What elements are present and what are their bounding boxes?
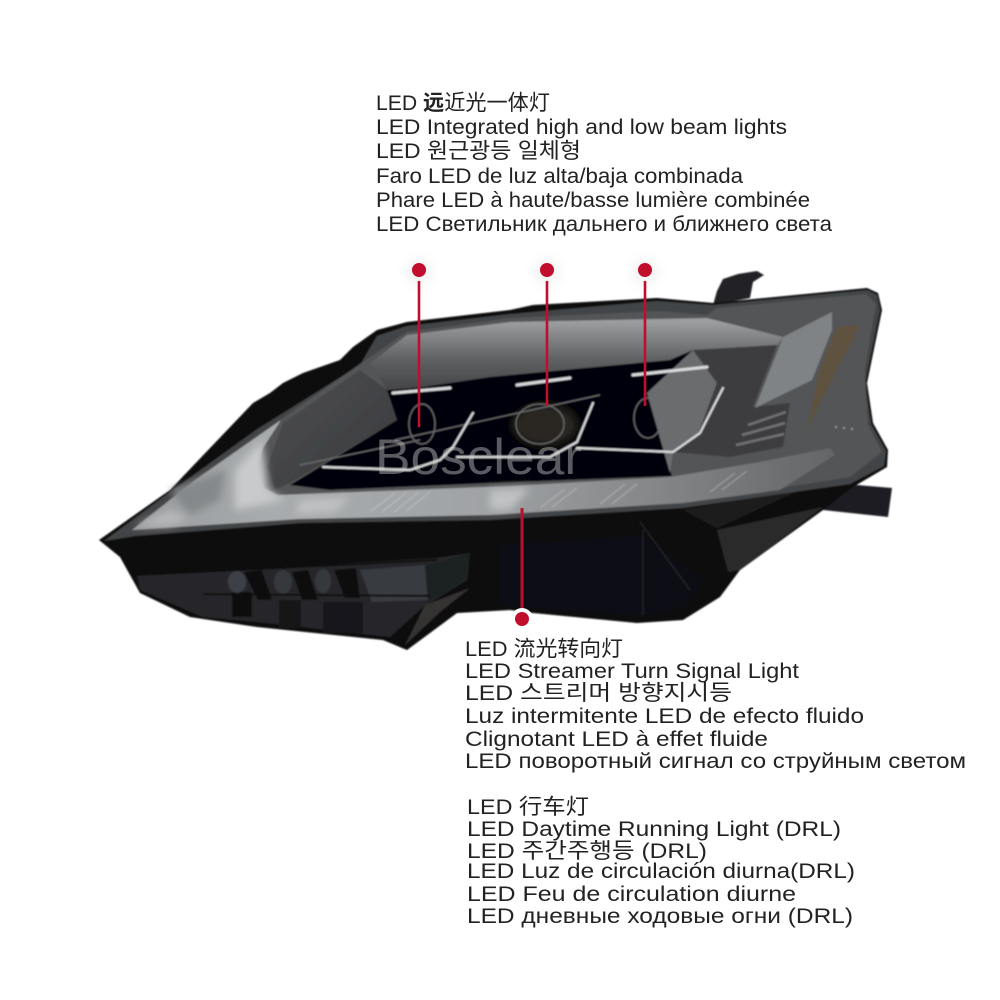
lens clear area [132,294,882,530]
marker pin: left projector [407,260,431,427]
reflector slats [736,412,786,445]
inner dark recess [673,345,790,457]
outer lens frame [104,290,886,541]
left inner grey panel [267,370,397,490]
text block: turn signal: LED 스트리머 방향지시등 [465,681,732,705]
text block: daytime running light: LED дневные ходовые огни (DRL) [467,904,853,928]
text block: daytime running light: LED Daytime Running Light (DRL) [467,817,841,841]
right lens light strip [755,312,832,408]
text block: turn signal: LED Streamer Turn Signal Light [465,659,799,683]
text block: high and low beam: LED Integrated high and low beam lights [376,115,787,139]
text block: turn signal: Luz intermitente LED de efecto fluido [465,704,864,728]
text block: high and low beam: Phare LED à haute/basse lumière combinée [376,188,810,212]
text block: high and low beam: Faro LED de luz alta/baja combinada [376,164,743,188]
watermark: Bosclear [375,429,582,485]
amber reflector [807,325,860,430]
text block: high and low beam: LED Светильник дальнего и ближнего света [376,212,832,236]
lower housing reflections [500,490,823,616]
black projector cavity [290,350,693,490]
text block: turn signal: LED 流光转向灯 [465,637,623,661]
DRL light band [132,420,835,530]
text block: turn signal [465,637,966,773]
text block: high and low beam: LED 원근광등 일체형 [376,139,581,163]
marker pin: right projector [633,260,657,406]
low beam projector lenses [300,395,662,465]
DRL band shading [135,440,530,526]
text block: high and low beam: LED 远近光一体灯 [376,91,550,115]
rear mounting bracket right [823,485,892,517]
upper lens band [370,318,783,390]
text block: daytime running light: LED Luz de circulación diurna(DRL) [467,859,855,883]
plastic mounting bracket [137,553,470,645]
text block: turn signal: Clignotant LED à effet fluide [465,727,768,751]
text block: daytime running light: LED 주간주행등 (DRL) [467,839,707,863]
headlight assembly [99,271,892,650]
right translucent panel [647,350,717,473]
dark housing [99,288,888,650]
text block: turn signal: LED поворотный сигнал со струйным светом [465,749,966,773]
text block: daytime running light: LED 行车灯 [467,795,589,819]
chrome accent lines [323,367,723,470]
text block: high and low beam [376,91,832,236]
projector interior tone [513,405,577,445]
rear mounting tab upper [713,271,764,305]
DRL hatch lines [370,471,747,512]
marker pin: turn signal [511,508,533,630]
marker pin: centre projector [535,260,559,406]
turn signal dots [835,426,853,430]
text block: daytime running light: LED Feu de circulation diurne [467,882,796,906]
text block: daytime running light [467,795,855,928]
